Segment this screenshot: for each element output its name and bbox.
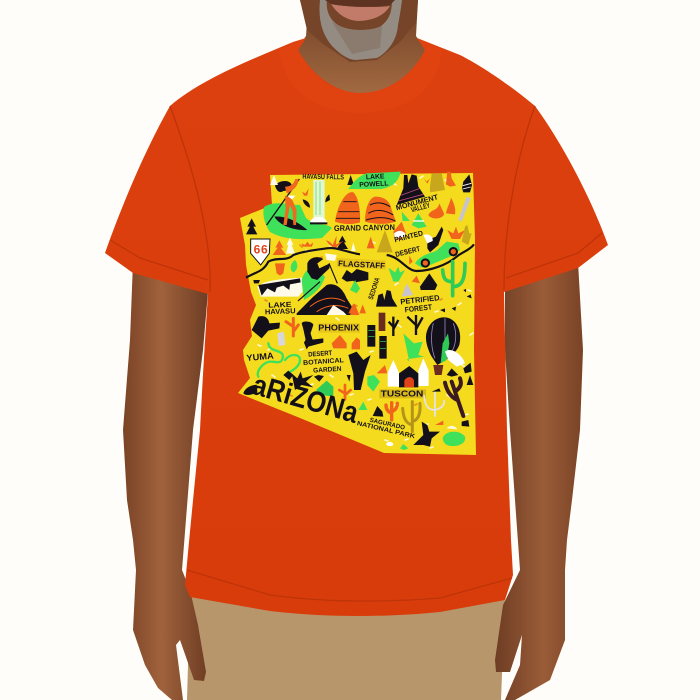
hot air balloon	[426, 317, 465, 375]
red butte	[365, 197, 396, 224]
grey cactus	[424, 392, 444, 417]
left arm and hand	[123, 262, 208, 700]
black prickly pear	[252, 316, 323, 349]
green striped cactus pad	[316, 381, 333, 397]
fir trees	[246, 175, 354, 255]
classic car with driver	[415, 227, 460, 268]
Sedona label: SEDONA	[368, 277, 382, 301]
hiker	[298, 253, 337, 301]
Flagstaff label: FLAGSTAFF	[338, 259, 385, 270]
lips	[331, 4, 390, 21]
waterfall	[310, 180, 327, 224]
green cactus	[443, 262, 465, 296]
orange plant icons	[275, 188, 343, 276]
orange cactus	[386, 403, 397, 420]
model: arms and hands	[123, 262, 583, 700]
red mountain	[297, 284, 359, 315]
green snake	[258, 343, 300, 377]
orange cactus	[286, 318, 298, 336]
west highway	[246, 248, 360, 278]
orange cactus small	[339, 385, 351, 399]
right arm and hand	[495, 262, 583, 700]
Saguaro National Park label: SAGURADO	[369, 417, 406, 432]
northwest quadrant illustrations: HAVASU	[265, 306, 296, 316]
right dark cactus	[445, 378, 463, 416]
Lake Havasu label: LAKE	[268, 300, 292, 310]
dark cacti	[389, 315, 423, 336]
agave plants	[409, 227, 465, 264]
dark prickly pear	[348, 352, 371, 390]
green accent	[358, 402, 367, 410]
shirt body	[105, 38, 608, 616]
black boulders	[342, 270, 360, 282]
t-shirt	[105, 38, 608, 616]
bottom hem	[187, 570, 512, 601]
route 66 shield	[251, 239, 270, 265]
state outline	[238, 173, 476, 455]
green cactus	[403, 333, 424, 362]
barrel cactus	[443, 426, 465, 446]
San Xavier mission	[388, 358, 429, 387]
white and green accents	[386, 442, 393, 446]
chin stubble	[332, 22, 382, 54]
neck	[290, 0, 432, 98]
Colorado River green patch	[263, 203, 332, 239]
northeast quadrant illustrations	[348, 172, 474, 314]
Route 66 highway	[387, 244, 474, 271]
route 66 shield: 66	[254, 242, 268, 256]
olive cactus	[403, 402, 420, 432]
pants	[187, 596, 505, 700]
speckles	[258, 176, 473, 448]
sleeve seams	[110, 106, 602, 292]
jaw shadow	[300, 0, 418, 62]
grey beard	[320, 0, 402, 60]
Arizona map	[238, 172, 476, 455]
rocks	[348, 269, 437, 297]
Petrified Forest label: PETRIFIED	[400, 293, 440, 306]
trees	[351, 230, 393, 252]
black leaves	[253, 194, 330, 283]
Monument Valley label: MONUMENT	[395, 192, 440, 212]
Desert Botanical Garden label: DESERT	[308, 350, 332, 359]
southeast quadrant illustrations	[348, 313, 473, 450]
model: neck and face	[290, 0, 432, 98]
southwest quadrant illustrations: BOTANICAL	[303, 357, 344, 367]
green balloon plant	[291, 260, 297, 272]
Sedona rocks	[376, 290, 397, 307]
small rocks	[373, 363, 473, 427]
London bridge	[257, 278, 303, 297]
top right desert objects	[423, 172, 472, 222]
silver rock	[277, 332, 285, 346]
striped pillars	[367, 313, 387, 359]
small marks	[440, 289, 472, 312]
Painted Desert label: PAINTED	[393, 228, 424, 244]
southwest quadrant illustrations	[243, 316, 363, 430]
orange butte	[335, 192, 360, 224]
flame rocks	[393, 198, 455, 240]
Grand Canyon label: GRAND CANYON	[334, 223, 395, 233]
Yuma label: YUMA	[246, 351, 275, 363]
Phoenix label: PHOENIX	[318, 322, 359, 332]
agave plants	[377, 365, 387, 373]
Havasu Falls label: HAVASU FALLS	[302, 174, 344, 181]
southeast quadrant illustrations: NATIONAL PARK	[356, 420, 416, 440]
northwest quadrant illustrations	[246, 174, 360, 316]
Lake Powell patch	[348, 172, 401, 189]
southwest quadrant illustrations: GARDEN	[313, 366, 342, 375]
monument valley mesa	[397, 174, 425, 205]
Arizona title: aRiZONa	[249, 368, 363, 430]
prickly pear bottom	[413, 422, 440, 447]
black desert plants	[283, 371, 351, 390]
Lake Powell patch: POWELL	[359, 180, 389, 189]
Tuscon label: TUSCON	[381, 389, 423, 399]
Lake Powell patch: LAKE	[366, 173, 385, 181]
orange rocks	[348, 303, 366, 313]
moustache base	[325, 0, 395, 7]
northeast quadrant illustrations: VALLEY	[410, 201, 431, 214]
collar	[279, 38, 442, 113]
paddle boarder	[267, 179, 307, 230]
northeast quadrant illustrations: FOREST	[404, 302, 433, 314]
northeast quadrant illustrations: DESERT	[394, 244, 421, 259]
orange rock stack	[332, 335, 360, 349]
